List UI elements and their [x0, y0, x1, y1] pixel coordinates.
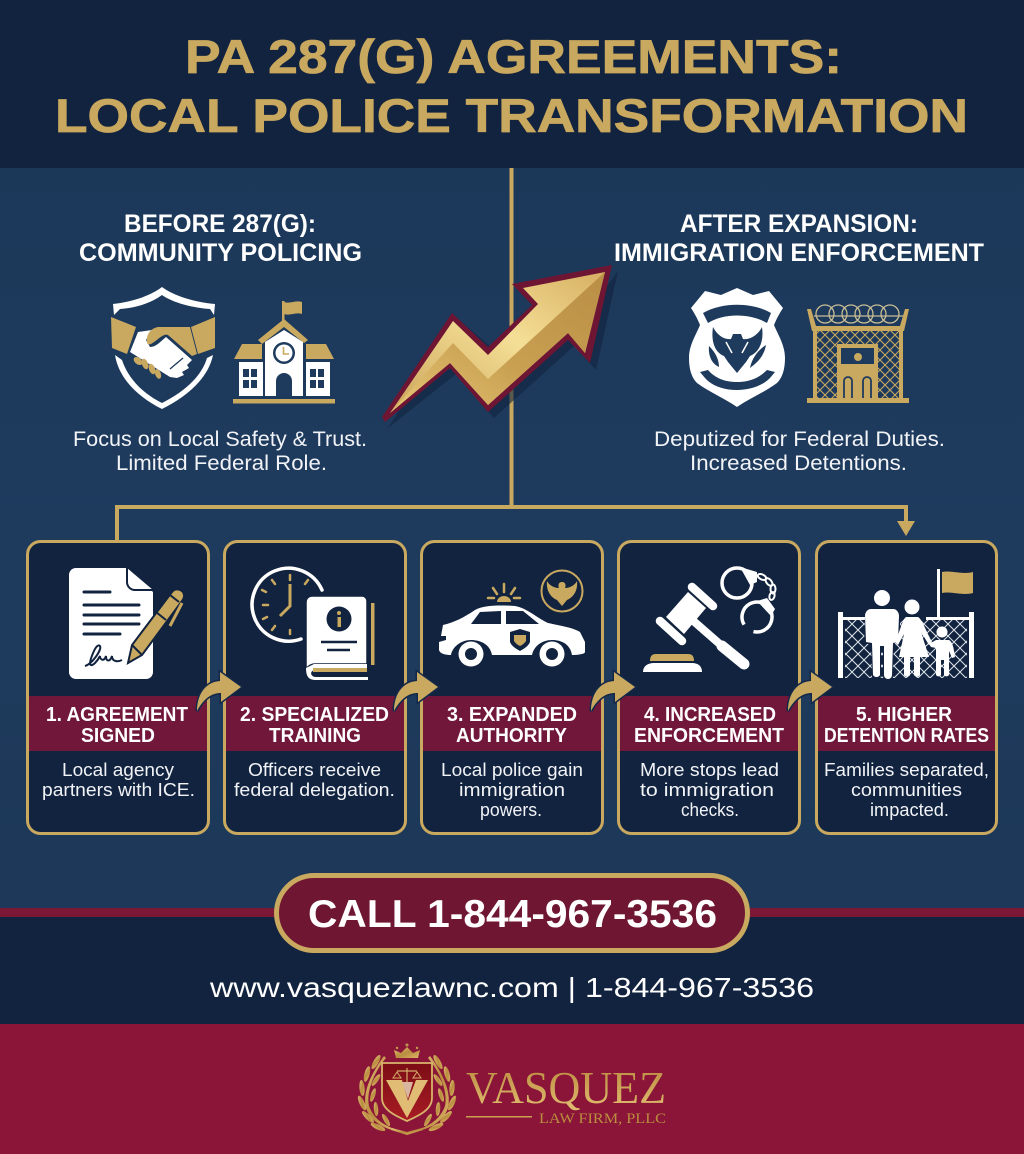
step 1 label: [46, 704, 188, 747]
heading: after: IMMIGRATION ENFORCEMENT: [614, 239, 984, 267]
step 2 label: [240, 704, 389, 747]
icon: police car and seal: [439, 570, 585, 666]
step 5 description: Families separated,: [824, 760, 989, 780]
description: before: Focus on Local Safety & Trust.: [73, 428, 367, 451]
connector: centre line and branch arrow: [117, 168, 915, 540]
panel: step 1 agreement signed: [28, 542, 208, 834]
panel: step 3 expanded authority: [422, 542, 602, 834]
step 3 description: Local police gain: [441, 760, 583, 780]
step 3 description: [441, 760, 583, 820]
heading: after: AFTER EXPANSION:: [680, 210, 918, 238]
heading: before: COMMUNITY POLICING: [79, 239, 362, 267]
step 4 label: [634, 704, 784, 747]
logo underline: [466, 1116, 532, 1118]
icon: clock and book: [252, 568, 374, 680]
panel: step 5 higher detention rates: [816, 542, 996, 834]
maroon divider: [0, 908, 1024, 917]
description: before: [73, 428, 367, 475]
logo scales and V: [386, 1068, 428, 1118]
description: after: Increased Detentions.: [690, 452, 907, 475]
step 5 description: [824, 760, 989, 820]
step 3 label: [447, 704, 577, 747]
step 3 description: powers.: [480, 800, 542, 820]
description: after: [654, 428, 945, 475]
step 4 label: ENFORCEMENT: [634, 725, 784, 747]
logo laurel: [356, 1054, 458, 1135]
step 1 label: SIGNED: [81, 725, 155, 747]
contact line: www.vasquezlawnc.com | 1-844-967-3536: [209, 972, 814, 1003]
icon: signed document: [69, 568, 184, 679]
icon: rising arrow: [382, 265, 618, 428]
step 2 label: TRAINING: [269, 725, 361, 747]
step 2 description: Officers receive: [248, 760, 381, 780]
icon: federal badge: [689, 288, 785, 407]
step 5 label: 5. HIGHER: [856, 704, 953, 726]
step 1 description: Local agency: [62, 760, 174, 780]
icon: detention building: [807, 305, 909, 403]
logo: Vasquez Law Firm: [356, 1044, 666, 1135]
step 4 description: [640, 760, 779, 820]
arrow: step 2 to 3: [394, 672, 438, 711]
step 5 label: DETENTION RATES: [824, 725, 989, 747]
heading: before: BEFORE 287(G):: [124, 210, 316, 238]
step 3 description: immigration: [459, 780, 565, 800]
icon: family at fence: [838, 569, 974, 680]
title: LOCAL POLICE TRANSFORMATION: [55, 89, 968, 142]
logo subtitle: LAW FIRM, PLLC: [539, 1111, 666, 1127]
panel: step 2 specialized training: [224, 542, 406, 834]
icon: handshake shield: [111, 287, 215, 409]
panel: step 4 increased enforcement: [618, 542, 800, 834]
step 2 label: 2. SPECIALIZED: [240, 704, 389, 726]
step 5 description: impacted.: [870, 800, 949, 820]
lower contact band: [0, 913, 1024, 1024]
step 3 label: AUTHORITY: [456, 725, 568, 747]
title: [55, 30, 968, 142]
step 4 description: to immigration: [640, 780, 774, 800]
arrow: step 4 to 5: [788, 672, 832, 711]
step 5 description: communities: [851, 780, 962, 800]
title: PA 287(G) AGREEMENTS:: [185, 30, 842, 83]
call to action button: [276, 876, 748, 950]
step 4 label: 4. INCREASED: [644, 704, 776, 726]
icon: gavel and handcuffs: [643, 567, 777, 672]
heading: before: [79, 210, 362, 267]
logo crown: [394, 1044, 420, 1058]
call to action button: CALL 1-844-967-3536: [308, 893, 717, 936]
step 1 label: 1. AGREEMENT: [46, 704, 188, 726]
step 2 description: [234, 760, 395, 800]
description: before: Limited Federal Role.: [116, 452, 327, 475]
step 4 description: More stops lead: [640, 760, 779, 780]
step 1 description: partners with ICE.: [42, 780, 195, 800]
header band: [0, 0, 1024, 168]
logo wordmark: VASQUEZ: [466, 1062, 666, 1113]
step 3 label: 3. EXPANDED: [447, 704, 577, 726]
step 1 description: [42, 760, 195, 800]
description: after: Deputized for Federal Duties.: [654, 428, 945, 451]
arrow: step 3 to 4: [591, 672, 635, 711]
step 2 description: federal delegation.: [234, 780, 395, 800]
step 5 label: [824, 704, 989, 747]
footer band: [0, 1024, 1024, 1154]
logo shield: [382, 1063, 432, 1121]
heading: after: [614, 210, 984, 267]
step 4 description: checks.: [681, 800, 739, 820]
arrow: step 1 to 2: [197, 672, 241, 711]
main panel background: [0, 168, 1024, 913]
icon: school: [233, 301, 335, 404]
